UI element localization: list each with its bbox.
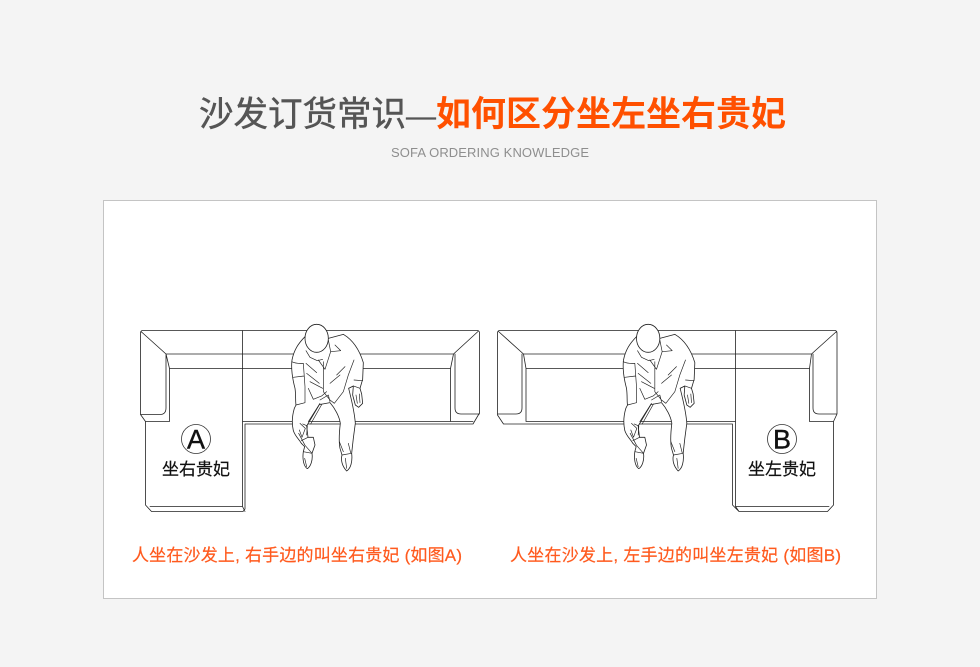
label A: 坐右贵妃 <box>162 460 230 479</box>
person seated on sofa B <box>623 324 695 471</box>
marker B: B <box>773 424 791 454</box>
title: orange part: 如何区分坐左坐右贵妃 <box>436 95 786 134</box>
marker B <box>768 424 796 454</box>
sofa B outline <box>498 330 837 512</box>
caption B: 人坐在沙发上, 左手边的叫坐左贵妃 (如图B) <box>510 546 841 565</box>
title: dash: — <box>406 100 436 133</box>
diagram B: sofa with left chaise <box>498 324 837 512</box>
person seated on sofa A <box>292 324 363 471</box>
label B: 坐左贵妃 <box>748 460 816 479</box>
title <box>199 95 786 134</box>
caption A: 人坐在沙发上, 右手边的叫坐右贵妃 (如图A) <box>132 546 462 565</box>
marker A: A <box>187 424 205 454</box>
title: grey part: 沙发订货常识 <box>199 96 406 134</box>
panel: sofa comparison <box>104 200 876 598</box>
sofa A outline <box>140 330 480 512</box>
marker A <box>182 424 210 454</box>
diagram A: sofa with right chaise <box>140 324 480 512</box>
subtitle: SOFA ORDERING KNOWLEDGE <box>391 145 589 160</box>
